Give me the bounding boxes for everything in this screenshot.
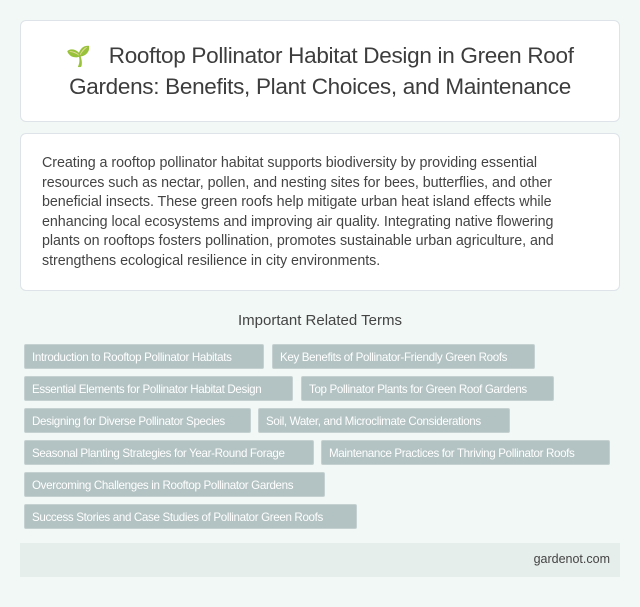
tag <box>24 440 314 465</box>
description card <box>20 133 620 291</box>
tag: Soil, Water, and Microclimate Considerations <box>266 415 481 428</box>
tag: Success Stories and Case Studies of Pollinator Green Roofs <box>32 511 323 524</box>
tag <box>24 408 251 433</box>
description text: resources such as nectar, pollen, and nesting sites for bees, butterflies, and other <box>42 174 552 190</box>
footer <box>20 543 620 577</box>
tag: Maintenance Practices for Thriving Pollinator Roofs <box>329 447 574 460</box>
description text <box>42 155 554 268</box>
description text: strengthens ecological resilience in city environments. <box>42 252 380 268</box>
description text: Creating a rooftop pollinator habitat supports biodiversity by providing essential <box>42 155 537 171</box>
tag: Key Benefits of Pollinator-Friendly Green Roofs <box>280 351 507 364</box>
tag <box>272 344 535 369</box>
tag <box>321 440 610 465</box>
tag <box>258 408 510 433</box>
description text: beneficial insects. These green roofs help mitigate urban heat island effects while <box>42 194 552 210</box>
tag: Introduction to Rooftop Pollinator Habitats <box>32 351 232 364</box>
tag <box>24 504 357 529</box>
header card <box>20 20 620 122</box>
tag: Designing for Diverse Pollinator Species <box>32 415 225 428</box>
tag <box>24 344 264 369</box>
tag: Seasonal Planting Strategies for Year-Round Forage <box>32 447 285 460</box>
tag <box>301 376 554 401</box>
related terms heading: Important Related Terms <box>238 312 402 329</box>
description text: plants on rooftops fosters pollination, promotes sustainable urban agriculture, and <box>42 233 554 249</box>
tag: Top Pollinator Plants for Green Roof Gardens <box>309 383 527 396</box>
description text: enhancing local ecosystems and improving air quality. Integrating native flowering <box>42 214 553 230</box>
tag <box>24 472 325 497</box>
tag: Overcoming Challenges in Rooftop Pollinator Gardens <box>32 479 293 492</box>
footer source: gardenot.com <box>534 552 610 566</box>
title: 🌱 Rooftop Pollinator Habitat Design in Green Roof Gardens: Benefits, Plant Choices, and Maintenance <box>66 43 574 99</box>
tag <box>24 376 293 401</box>
tag: Essential Elements for Pollinator Habitat Design <box>32 383 261 396</box>
